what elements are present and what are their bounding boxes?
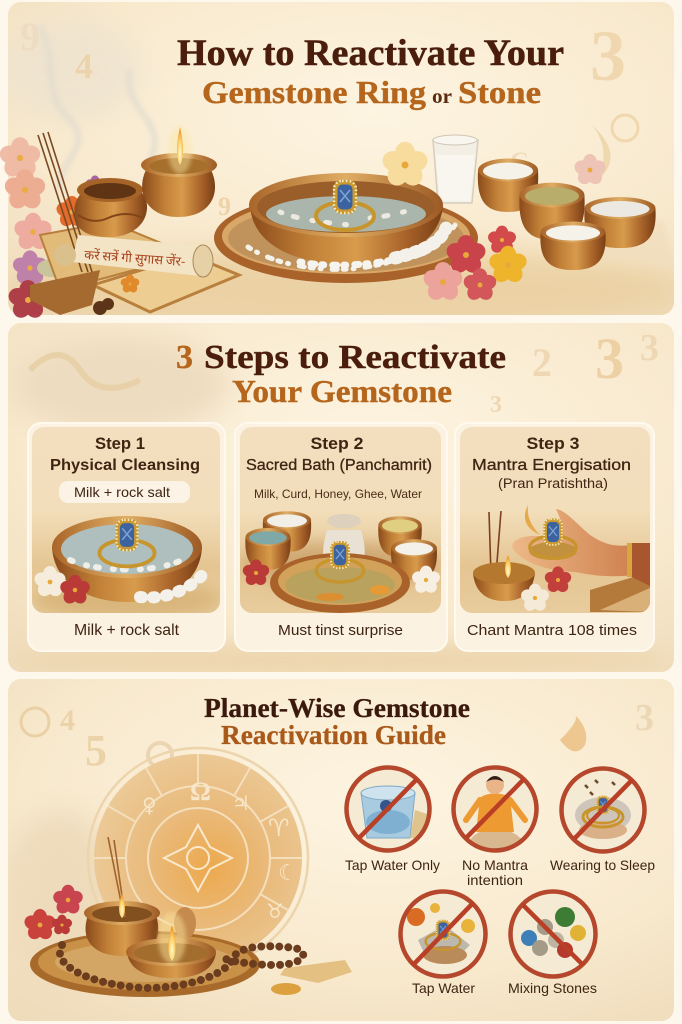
guide decorative washes and numerals: 4 — [60, 704, 75, 737]
grain pile — [271, 983, 301, 995]
card: step 3 — [455, 423, 654, 651]
parchment scroll with mantra — [72, 235, 213, 277]
hero decorative washes and numerals: 9 — [20, 14, 40, 59]
title line 1: Steps to Reactivate — [204, 339, 506, 376]
hero decorative washes and numerals: 4 — [75, 46, 93, 86]
steps decorative washes and numerals: 2 — [532, 340, 552, 385]
icon — [510, 892, 596, 976]
hero decorative washes and numerals: 3 — [590, 16, 626, 96]
zodiac wheel — [88, 748, 308, 968]
brass bowl — [249, 173, 443, 264]
label — [462, 857, 528, 888]
card body — [235, 423, 447, 651]
steps paper background — [8, 323, 674, 672]
incense holder box and flowers — [30, 244, 140, 315]
brass pot with lamp flame — [141, 126, 217, 217]
oil diya with flame — [126, 912, 216, 978]
step number: Step 1 — [95, 434, 145, 453]
panel: three steps — [8, 323, 674, 678]
steps decorative washes and numerals: 3 — [490, 392, 502, 418]
prohibition icon: mixing stones — [508, 892, 597, 996]
guide decorative washes and numerals: 5 — [85, 726, 107, 775]
prohibition icon: tap water — [400, 892, 486, 996]
title line 2: Reactivation Guide — [221, 720, 446, 750]
guide decorative washes and numerals: 3 — [635, 697, 654, 739]
panel: planet-wise guide — [0, 679, 674, 1021]
step 3 footer: Chant Mantra 108 times — [467, 622, 637, 639]
card body — [28, 423, 225, 651]
step name: Physical Cleansing — [50, 457, 200, 474]
title line 1: Planet-Wise Gemstone — [204, 693, 470, 723]
icon — [400, 892, 486, 976]
numeral 3: 3 — [176, 339, 193, 376]
zodiac wheel: Ω — [190, 777, 211, 806]
title line 1: How to Reactivate Your — [177, 32, 564, 73]
steps title — [176, 339, 506, 409]
wooden board — [280, 960, 352, 983]
prohibition icon: tap water only — [345, 768, 440, 873]
step name: Mantra Energisation — [472, 457, 631, 474]
brass puja plate — [30, 931, 260, 997]
prohibition icon: no mantra intention — [454, 768, 536, 888]
step name: Sacred Bath (Panchamrit) — [246, 457, 432, 474]
label: Tap Water Only — [345, 857, 440, 873]
panel: hero — [0, 2, 682, 334]
label: Tap Water — [412, 980, 475, 996]
prohibition icon: wearing to sleep — [550, 768, 655, 873]
glass of milk — [433, 135, 478, 203]
step 1 illustration — [32, 427, 222, 620]
step 1 heading — [50, 434, 200, 474]
left flower bouquet — [0, 137, 105, 321]
hero decorative washes and numerals: C — [510, 147, 529, 176]
ingredient pill: Milk + rock salt — [74, 484, 170, 500]
clay pot with spout — [74, 178, 147, 237]
card: step 2 — [235, 423, 447, 651]
icon — [562, 768, 644, 852]
step number: Step 2 — [310, 434, 364, 453]
label: Mixing Stones — [508, 980, 597, 996]
zodiac wheel: ♀︎ — [142, 793, 157, 817]
guide title — [204, 693, 470, 750]
rock salt in bowl and on plate — [248, 208, 455, 269]
step 2 illustration — [240, 427, 442, 613]
step 3 heading — [472, 434, 631, 491]
title line 2: Your Gemstone — [232, 373, 452, 409]
ingredient pill — [59, 481, 190, 503]
zodiac wheel: ♉︎ — [266, 899, 284, 923]
step number: Step 3 — [526, 434, 580, 453]
incense sticks — [38, 132, 92, 272]
guide paper background — [8, 679, 674, 1021]
hero decorative washes and numerals: 9 — [218, 192, 231, 221]
card: step 1 — [28, 423, 225, 651]
icon — [454, 768, 536, 850]
zodiac wheel: ♈︎ — [268, 814, 290, 842]
steps decorative washes and numerals: 3 — [640, 327, 659, 369]
title line 2: Gemstone Ring: Gemstone Ring — [202, 74, 426, 110]
right flower group — [421, 154, 607, 303]
guide decorative washes and numerals — [0, 697, 654, 990]
offering bowls — [478, 158, 656, 270]
ingredients line: Milk, Curd, Honey, Ghee, Water — [254, 487, 422, 501]
red flowers — [23, 885, 85, 942]
zodiac wheel: ☾︎ — [278, 861, 298, 886]
card body — [455, 423, 654, 651]
large brass plate — [214, 193, 478, 283]
label line 1: No Mantra — [462, 857, 528, 873]
step subname: (Pran Pratishtha) — [498, 476, 608, 491]
icon — [346, 768, 430, 850]
zodiac wheel: ♃︎ — [232, 791, 250, 815]
step 1 footer: Milk + rock salt — [74, 622, 180, 639]
hero paper background — [8, 2, 674, 315]
label line 2: intention — [467, 872, 523, 888]
label: Wearing to Sleep — [550, 857, 655, 873]
hero title — [177, 32, 564, 110]
step 2 footer: Must tinst surprise — [278, 622, 403, 639]
hero decorative washes and numerals — [0, 14, 682, 334]
title word: Stone: Stone — [458, 74, 541, 110]
steps decorative washes and numerals — [10, 326, 670, 678]
sapphire gold ring — [316, 180, 374, 230]
small carved stone — [174, 907, 196, 939]
wooden tile with scroll mat — [40, 222, 239, 312]
brass pot — [84, 837, 160, 956]
rudraksha beads — [60, 945, 303, 988]
step 3 illustration — [460, 427, 650, 613]
parchment scroll with mantra: करें सत्रें गी सुगास जेंर- — [84, 244, 186, 270]
step 2 heading — [246, 434, 432, 474]
steps decorative washes and numerals: 3 — [595, 326, 624, 391]
bloom near bowl — [380, 142, 430, 190]
title word: or: or — [432, 84, 452, 108]
